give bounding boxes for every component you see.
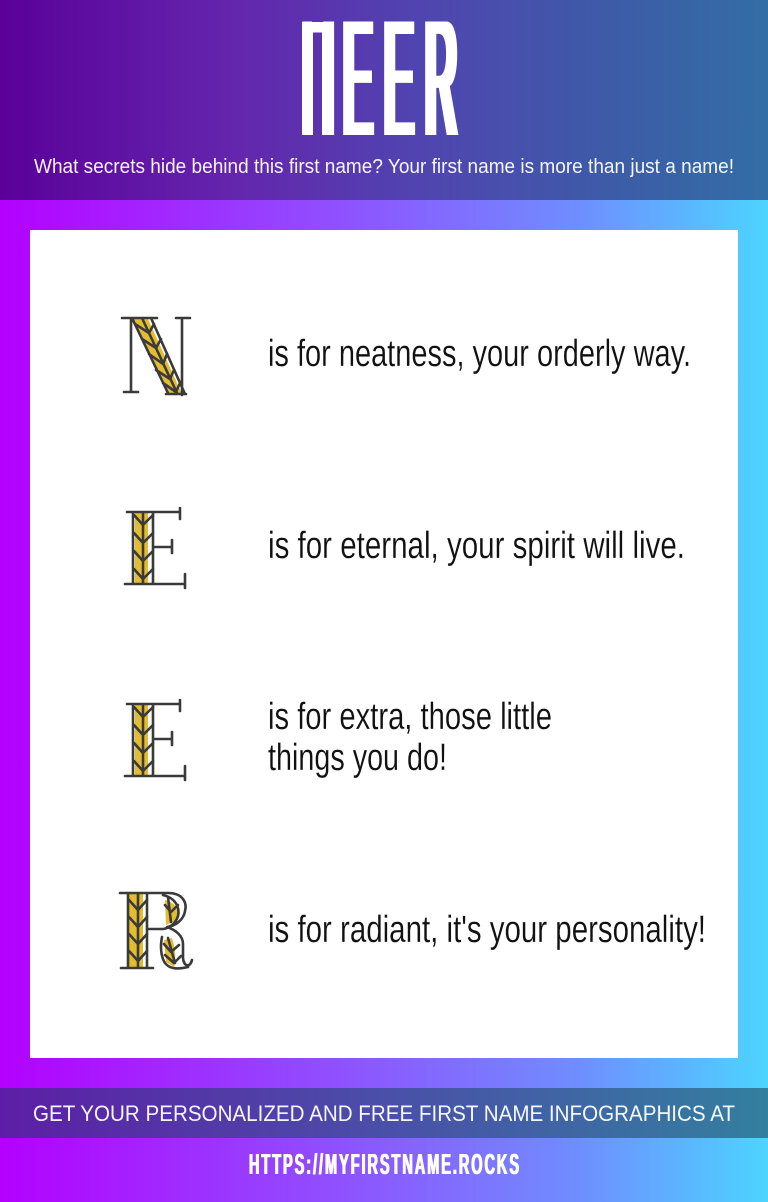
row: letter E bbox=[125, 508, 685, 588]
text: second E lines bbox=[268, 696, 552, 779]
text: second E lines: things you do! bbox=[268, 737, 447, 779]
row: letter R bbox=[120, 893, 706, 968]
icon: letter E bbox=[125, 508, 185, 588]
panel: white card bbox=[30, 230, 738, 1058]
text: second E lines: is for extra, those little bbox=[268, 696, 552, 738]
footer url: HTTPS://MYFIRSTNAME.ROCKS bbox=[249, 1147, 519, 1180]
title bbox=[302, 22, 458, 135]
row: letter E second bbox=[125, 696, 552, 780]
icon: letter E bbox=[125, 700, 185, 780]
subtitle: What secrets hide behind this first name? Your first name is more than just a name! bbox=[34, 155, 734, 178]
row: letter N bbox=[122, 318, 691, 395]
icon: letter N bbox=[122, 318, 190, 395]
icon: letter R bbox=[120, 893, 192, 968]
header band bbox=[0, 0, 768, 200]
footer band bbox=[0, 1088, 768, 1138]
